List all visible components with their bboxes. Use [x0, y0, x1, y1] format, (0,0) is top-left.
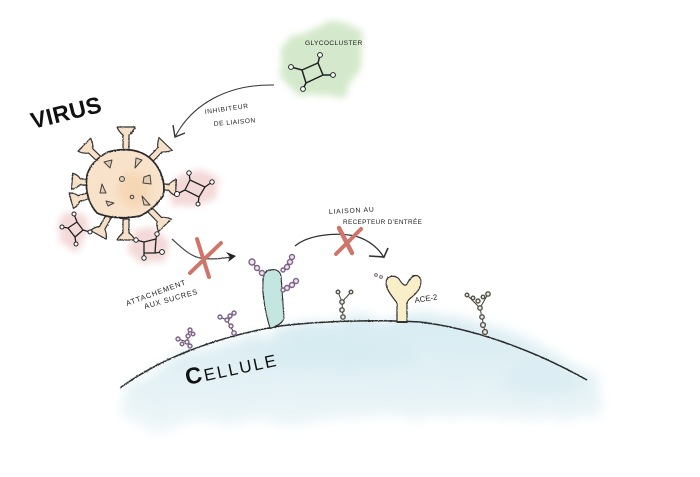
virus body [86, 150, 164, 218]
virus core shading [117, 175, 153, 205]
ACE-2 label: ACE-2 [414, 292, 438, 305]
stray glycan [375, 274, 382, 278]
glycocluster label: GLYCOCLUSTER [305, 40, 363, 47]
arrow: sugar attachment [172, 239, 236, 262]
receptor: ACE-2 [375, 274, 421, 322]
blocked mark: binding [336, 228, 361, 254]
receptor base [397, 321, 407, 323]
cell label: CELLULE [183, 345, 280, 390]
molecule: bound glycocluster left [60, 212, 92, 246]
arrow: receptor binding [295, 234, 388, 258]
attachment label: AUX SUCRES [143, 287, 199, 311]
virus [69, 127, 176, 240]
inhibitor label: INHIBITEUR [204, 103, 249, 116]
molecule: glycocluster [289, 53, 335, 91]
virus heading: VIRUS [28, 91, 104, 134]
cell watercolor wash [122, 316, 602, 430]
arrow: inhibitor [173, 85, 274, 137]
inhibitor label: DE LIAISON [214, 117, 256, 128]
binding label [329, 207, 422, 226]
binding label: RECEPTEUR D'ENTRÉE [343, 217, 422, 226]
spikes [69, 127, 176, 240]
inhibitor label [204, 103, 256, 128]
surface proteins [100, 158, 151, 206]
blocked mark: attachment [190, 239, 221, 277]
sugar receptor protein [263, 270, 284, 328]
attachment label: ATTACHEMENT [125, 278, 188, 308]
molecule: bound glycocluster right [174, 171, 214, 206]
panel: glycocluster [277, 20, 363, 97]
pink halos [58, 170, 216, 264]
molecule: bound glycocluster bottom [134, 232, 164, 260]
glycan chains [176, 254, 490, 348]
cell membrane [120, 321, 587, 388]
green wash [277, 20, 362, 97]
binding label: LIAISON AU [329, 207, 375, 216]
